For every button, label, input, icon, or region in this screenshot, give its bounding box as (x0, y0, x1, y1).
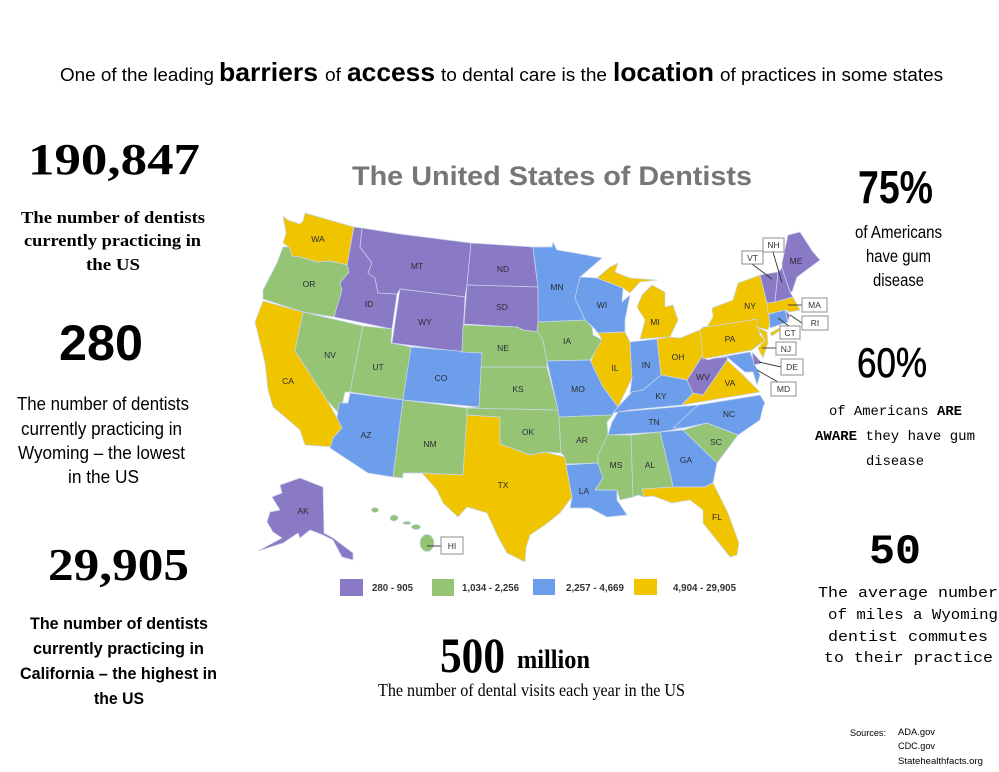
state labels (282, 234, 803, 522)
sources (850, 727, 983, 767)
state labels: OH (672, 352, 684, 362)
state labels: AR (576, 435, 588, 445)
stat: 60% aware of gum disease: AWARE they have gum (815, 429, 975, 445)
headline: of (325, 65, 342, 85)
map legend: 4,904 - 29,905 (673, 583, 736, 594)
state labels: NC (723, 409, 735, 419)
state labels: IA (563, 336, 571, 346)
stat: 500 million dental visits (378, 627, 685, 700)
state labels: LA (579, 486, 590, 496)
map legend: 280 - 905 (372, 583, 413, 594)
state labels: GA (680, 455, 692, 465)
callout labels for small states: CT (784, 328, 796, 338)
stat: 60% aware of gum disease: disease (866, 454, 924, 470)
state labels: IL (611, 363, 619, 373)
sources: ADA.gov (898, 727, 935, 738)
sources: Statehealthfacts.org (898, 756, 983, 767)
stat: 60% aware of gum disease: of Americans ARE (829, 404, 962, 420)
stat: 29,905 dentists in California (20, 539, 217, 708)
stat: 50 mile commute: 50 (869, 528, 921, 576)
callout labels for small states: DE (786, 362, 798, 372)
state labels: KY (655, 391, 667, 401)
state labels: NM (423, 439, 437, 449)
state labels: AL (645, 460, 655, 470)
state labels: IN (642, 360, 650, 370)
stat: 280 dentists in Wyoming: The number of dentists (17, 394, 189, 414)
state labels: WI (597, 300, 607, 310)
stat: 50 mile commute (818, 528, 998, 667)
stat: 75% gum disease: of Americans (855, 222, 942, 242)
callout labels for small states: MA (808, 300, 821, 310)
stat: 50 mile commute: to their practice (824, 650, 993, 667)
state labels: MT (411, 261, 423, 271)
stat: 500 million dental visits: million (517, 645, 591, 674)
stat: 75% gum disease: have gum (866, 246, 931, 266)
headline: access (347, 57, 435, 87)
stat: 60% aware of gum disease: 60% (857, 339, 927, 386)
stat: 190,847 dentists in the US: 190,847 (28, 135, 200, 184)
state labels: FL (712, 512, 722, 522)
callout labels for small states: HI (448, 541, 456, 551)
state labels: OK (522, 427, 534, 437)
stat: 29,905 dentists in California: 29,905 (48, 539, 189, 590)
callout labels for small states: RI (811, 318, 819, 328)
state labels: TN (648, 417, 660, 427)
map title: The United States of Dentists (352, 161, 752, 191)
state labels: TX (498, 480, 509, 490)
state labels: SD (496, 302, 508, 312)
state labels: WV (696, 372, 710, 382)
state labels: UT (372, 362, 384, 372)
stat: 75% gum disease (855, 161, 942, 290)
stat: 190,847 dentists in the US: the US (86, 255, 140, 274)
state labels: CO (435, 373, 448, 383)
state labels: KS (512, 384, 524, 394)
state labels: MS (610, 460, 623, 470)
state labels: NY (744, 301, 756, 311)
state labels: AK (297, 506, 309, 516)
state labels: ND (497, 264, 509, 274)
state labels: OR (303, 279, 315, 289)
stat: 190,847 dentists in the US: The number of dentists (21, 208, 205, 227)
headline (60, 57, 943, 87)
stat: 500 million dental visits: 500 (440, 627, 505, 683)
callout labels for small states (427, 238, 828, 554)
state labels: WA (311, 234, 325, 244)
stat: 29,905 dentists in California: currently practicing in (33, 640, 204, 658)
map: US states by dentist count (255, 213, 820, 562)
callout labels for small states: NH (767, 240, 780, 250)
stat: 60% aware of gum disease (815, 339, 975, 470)
state labels: MI (650, 317, 660, 327)
stat: 280 dentists in Wyoming: in the US (68, 467, 139, 487)
state labels: NE (497, 343, 509, 353)
headline: of practices in some states (720, 65, 943, 85)
stat: 190,847 dentists in the US: currently practicing in (24, 231, 202, 250)
state labels: MN (550, 282, 564, 292)
state labels: NV (324, 350, 336, 360)
callout labels for small states: VT (747, 253, 758, 263)
stat: 50 mile commute: of miles a Wyoming (828, 607, 998, 624)
state labels: WY (418, 317, 432, 327)
state labels: AZ (361, 430, 371, 440)
stat: 29,905 dentists in California: The number of dentists (30, 615, 208, 633)
state labels: SC (710, 437, 722, 447)
state labels: PA (725, 334, 736, 344)
stat: 50 mile commute: The average number (818, 585, 998, 602)
stat: 75% gum disease: 75% (858, 161, 933, 213)
stat: 190,847 dentists in the US (21, 135, 205, 274)
headline: barriers (219, 57, 318, 87)
stat: 29,905 dentists in California: the US (94, 690, 144, 708)
headline: One of the leading (60, 65, 214, 85)
callout labels for small states: MD (777, 384, 790, 394)
stat: 75% gum disease: disease (873, 270, 924, 290)
state labels: ID (365, 299, 373, 309)
stat: 29,905 dentists in California: California – the highest in (20, 665, 217, 683)
stat: 280 dentists in Wyoming (17, 315, 189, 487)
headline: to dental care is the (441, 65, 607, 85)
callout labels for small states: NJ (781, 344, 791, 354)
stat: 280 dentists in Wyoming: Wyoming – the lowest (18, 443, 185, 463)
map legend (340, 579, 736, 596)
stat: 280 dentists in Wyoming: currently practicing in (21, 419, 182, 439)
state labels: VA (725, 378, 736, 388)
state labels: ME (790, 256, 803, 266)
stat: 50 mile commute: dentist commutes (828, 629, 988, 646)
sources: CDC.gov (898, 741, 935, 752)
state labels: MO (571, 384, 585, 394)
map legend: 1,034 - 2,256 (462, 583, 519, 594)
state labels: CA (282, 376, 294, 386)
sources: Sources: (850, 728, 886, 739)
headline: location (613, 57, 714, 87)
map legend: 2,257 - 4,669 (566, 583, 624, 594)
stat: 280 dentists in Wyoming: 280 (59, 315, 143, 371)
stat: 500 million dental visits: The number of dental visits each year in the US (378, 680, 685, 700)
